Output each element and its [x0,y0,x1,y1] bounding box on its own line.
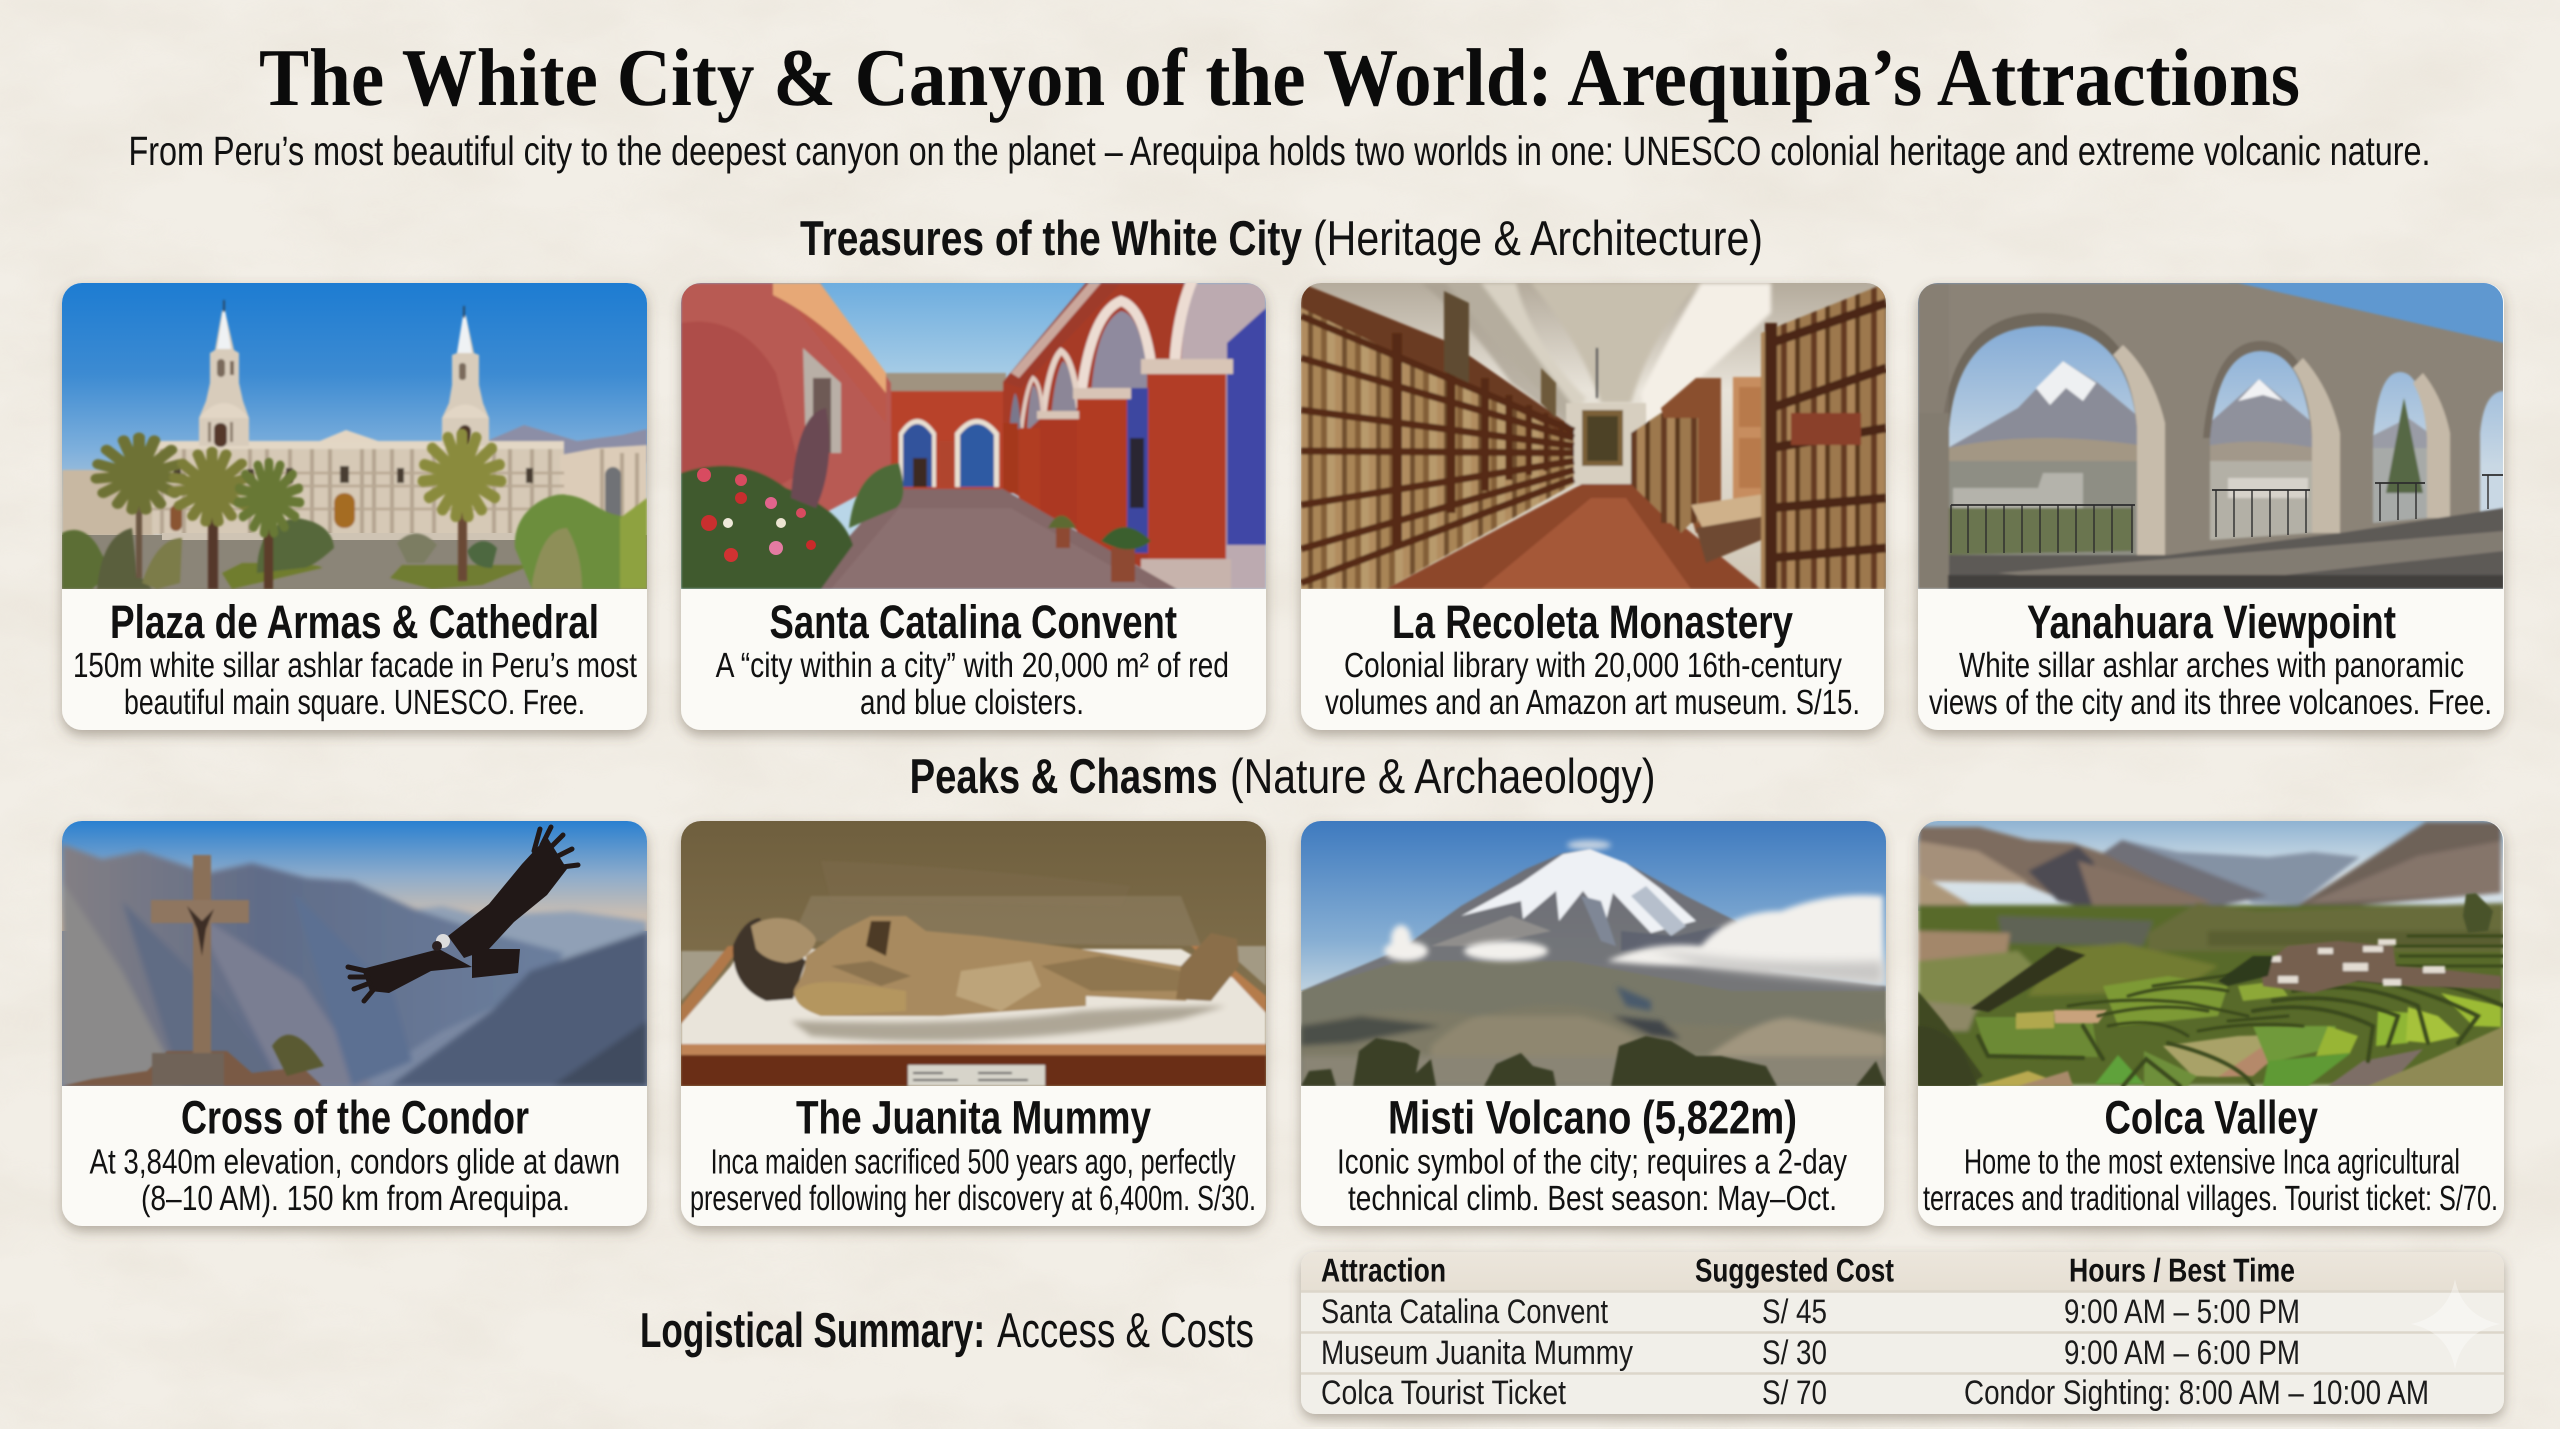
card description: beautiful main square. UNESCO. Free. [124,683,585,722]
row: Colca Tourist Ticket: Condor Sighting: 8:00 AM – 10:00 AM [1964,1374,2429,1412]
section heading: nature: (Nature & Archaeology) [1230,750,1656,804]
card description: technical climb. Best season: May–Oct. [1348,1179,1837,1218]
card title: Cross of the Condor [181,1090,529,1144]
row: Museum Juanita Mummy [1321,1334,2300,1372]
photo: red and blue cloisters [681,278,1266,589]
card: Santa Catalina Convent [681,278,1266,730]
summary table [1301,1252,2504,1414]
card description: 150m white sillar ashlar facade in Peru’s most [73,646,637,685]
card description: Inca maiden sacrificed 500 years ago, perfectly [711,1143,1236,1182]
card description [1929,646,2492,722]
photo: mummy in display case [681,821,1266,1086]
table header: Attraction [1321,1252,1446,1288]
row: Colca Tourist Ticket [1321,1374,2429,1412]
table header [1321,1252,2295,1288]
row: Museum Juanita Mummy: Museum Juanita Mummy [1321,1334,1633,1372]
row: Santa Catalina Convent: Santa Catalina Convent [1321,1293,1608,1331]
photo: snow-capped Misti volcano [1301,821,1886,1086]
photo: colonial library [1301,283,1886,589]
section heading: heritage: (Heritage & Architecture) [1313,212,1763,266]
card description [716,646,1229,722]
icon: sparkle watermark [2411,1279,2500,1369]
card title: Colca Valley [2104,1090,2318,1144]
row: Museum Juanita Mummy: S/ 30 [1762,1334,1827,1372]
card title: La Recoleta Monastery [1392,595,1793,648]
card: Plaza de Armas & Cathedral [62,283,647,730]
photo: Colca valley terraces [1918,821,2504,1086]
row: Colca Tourist Ticket: S/ 70 [1762,1374,1827,1412]
card title: The Juanita Mummy [796,1090,1151,1144]
card: Cross of the Condor [62,821,647,1226]
card description [73,646,637,722]
card description [1337,1143,1847,1218]
table header: Suggested Cost [1695,1252,1894,1288]
row: Santa Catalina Convent: 9:00 AM – 5:00 PM [2064,1293,2300,1331]
card: La Recoleta Monastery [1301,283,1886,730]
table header: Hours / Best Time [2069,1252,2295,1288]
card title: Santa Catalina Convent [770,595,1177,648]
logistical summary heading: Access & Costs [997,1304,1254,1358]
row: Santa Catalina Convent: S/ 45 [1762,1293,1827,1331]
card: Yanahuara Viewpoint [1918,283,2504,730]
card: Colca Valley [1918,821,2504,1226]
photo: cross and condor over canyon [62,821,647,1086]
card description: A “city within a city” with 20,000 m² of red [716,646,1229,685]
photo: cathedral on the plaza [62,283,647,589]
row: Santa Catalina Convent [1321,1293,2300,1331]
row: Colca Tourist Ticket: Colca Tourist Ticket [1321,1374,1566,1412]
card description: Iconic symbol of the city; requires a 2-day [1337,1143,1847,1182]
section heading: heritage: Treasures of the White City [800,212,1302,266]
card title: Plaza de Armas & Cathedral [110,595,599,648]
card description [1923,1143,2498,1218]
card description [1325,646,1860,722]
card title: Misti Volcano (5,822m) [1388,1090,1797,1144]
card description [90,1143,620,1218]
title: The White City & Canyon of the World: Arequipa’s Attractions [259,32,2300,123]
card description: preserved following her discovery at 6,400m. S/30. [690,1179,1256,1218]
section heading: heritage [800,212,1763,266]
section heading: nature [910,750,1656,804]
card description [690,1143,1256,1218]
card: Misti Volcano [1301,821,1886,1226]
card description: Colonial library with 20,000 16th-century [1344,646,1842,685]
card title: Yanahuara Viewpoint [2027,595,2396,648]
row: Museum Juanita Mummy: 9:00 AM – 6:00 PM [2064,1334,2300,1372]
card description: (8–10 AM). 150 km from Arequipa. [141,1179,570,1218]
card description: volumes and an Amazon art museum. S/15. [1325,683,1860,722]
card: The Juanita Mummy [681,821,1266,1226]
logistical summary heading: Logistical Summary: [640,1304,985,1358]
section heading: nature: Peaks & Chasms [910,750,1218,804]
card description: At 3,840m elevation, condors glide at dawn [90,1143,620,1182]
photo: sillar arches with volcano views [1918,283,2504,589]
card description: and blue cloisters. [860,683,1084,722]
